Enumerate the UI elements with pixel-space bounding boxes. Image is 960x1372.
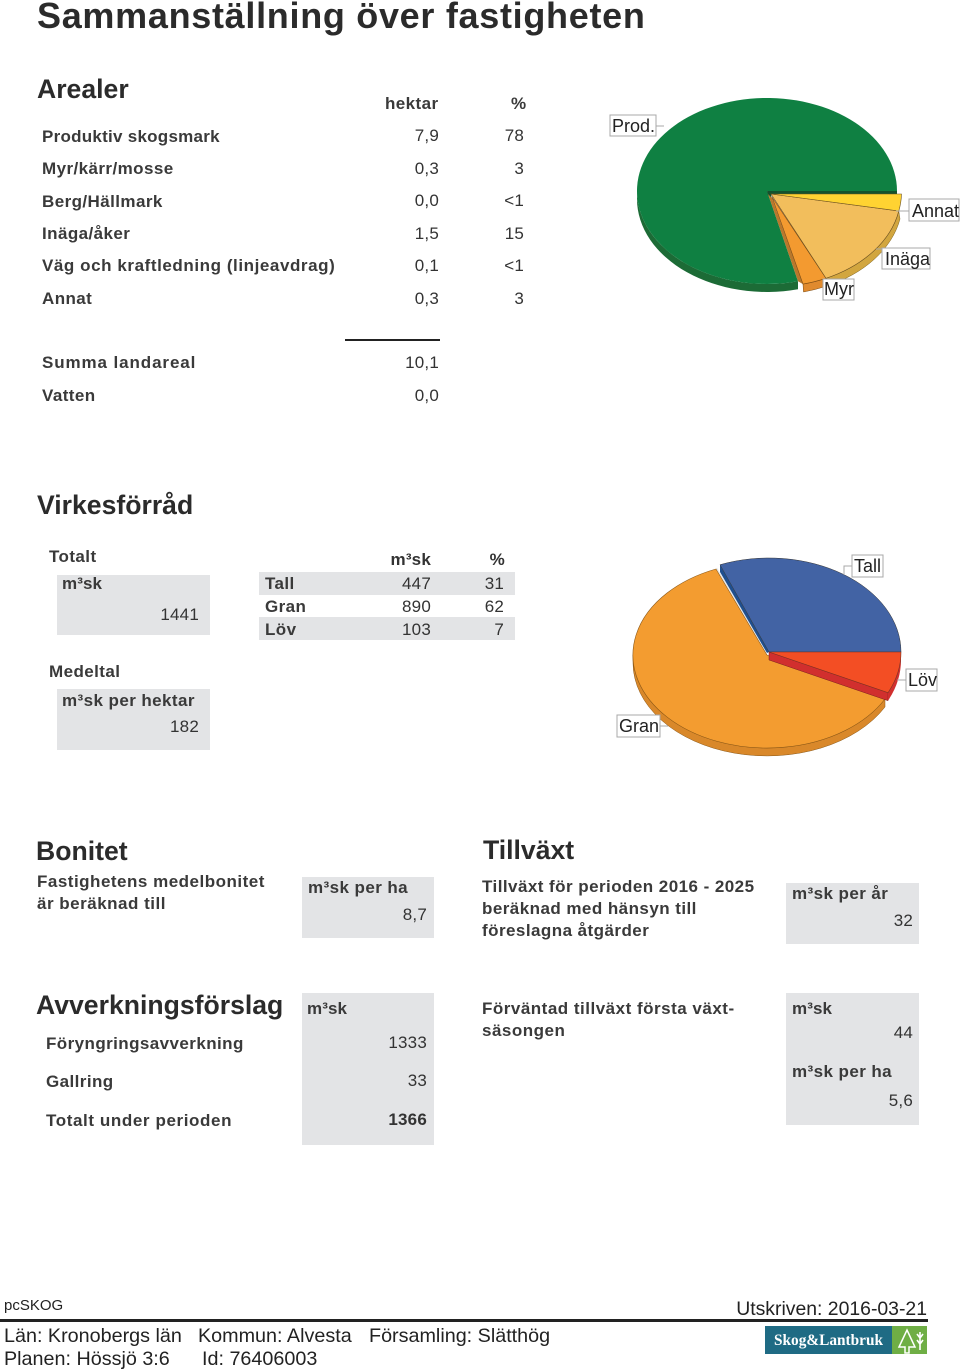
row: inäga bbox=[42, 224, 524, 243]
column header: hektar: hektar bbox=[385, 94, 439, 113]
row: löv: Löv bbox=[265, 620, 296, 639]
row: tall: Tall bbox=[265, 574, 295, 593]
row: gran bbox=[265, 597, 504, 616]
row: myr: 3 bbox=[514, 159, 524, 178]
box: totalt: 1441 bbox=[160, 605, 199, 624]
row: summa landareal: Summa landareal bbox=[42, 353, 196, 372]
label: löv: Löv bbox=[908, 670, 937, 690]
box: totalt: m³sk bbox=[62, 574, 102, 593]
box: totalt bbox=[57, 575, 210, 635]
table: species: m³sk bbox=[390, 550, 431, 569]
heading: avverkningsförslag: Avverkningsförslag bbox=[36, 990, 283, 1020]
box: förväntad values: m³sk per ha bbox=[792, 1062, 892, 1081]
panel: arealer bbox=[37, 74, 527, 405]
label: annat: Annat bbox=[912, 201, 959, 221]
row: gran: 62 bbox=[485, 597, 504, 616]
row: vatten bbox=[42, 386, 439, 405]
panel: bonitet bbox=[36, 836, 434, 938]
row: gran: Gran bbox=[265, 597, 306, 616]
text: förväntad tillväxt: säsongen bbox=[482, 1021, 565, 1040]
row: berg: 0,0 bbox=[415, 191, 439, 210]
row: gran: 890 bbox=[402, 597, 431, 616]
text: församling: Församling: Slätthög bbox=[369, 1325, 550, 1347]
text: tillväxt description: beräknad med hänsyn till bbox=[482, 899, 697, 918]
row: summa landareal: 10,1 bbox=[405, 353, 439, 372]
label: gran: Gran bbox=[619, 716, 659, 736]
heading: tillväxt: Tillväxt bbox=[483, 835, 574, 865]
row: summa landareal bbox=[42, 353, 439, 372]
pie chart: virkesförråd bbox=[616, 554, 938, 756]
footer bbox=[0, 1297, 928, 1370]
text: tillväxt description: föreslagna åtgärder bbox=[482, 921, 649, 940]
text: förväntad tillväxt bbox=[482, 999, 735, 1040]
logo: skog och lantbruk: Skog&Lantbruk bbox=[774, 1332, 883, 1349]
row: annat: 3 bbox=[514, 289, 524, 308]
row: tall: 31 bbox=[485, 574, 504, 593]
heading: virkesförråd: Virkesförråd bbox=[37, 490, 193, 520]
table: species: % bbox=[490, 550, 505, 569]
row: myr: Myr/kärr/mosse bbox=[42, 159, 174, 178]
label: totalt under perioden: Totalt under perioden bbox=[46, 1111, 232, 1130]
box: avverkning values bbox=[302, 993, 434, 1145]
row: annat: 0,3 bbox=[415, 289, 439, 308]
box: tillväxt: 32 bbox=[894, 911, 913, 930]
table: species bbox=[259, 550, 515, 640]
text: location line 1: Län: Kronobergs län bbox=[4, 1325, 182, 1347]
label: prod: Prod. bbox=[612, 116, 655, 136]
row: annat bbox=[42, 289, 524, 308]
row: löv bbox=[259, 617, 515, 640]
box: bonitet: m³sk per ha bbox=[308, 878, 408, 897]
row: annat: Annat bbox=[42, 289, 92, 308]
box: förväntad values bbox=[786, 993, 919, 1125]
label: myr: Myr bbox=[824, 279, 854, 299]
box: medeltal: 182 bbox=[170, 717, 199, 736]
row: väg bbox=[42, 256, 524, 275]
row: inäga: 15 bbox=[505, 224, 524, 243]
row: vatten: Vatten bbox=[42, 386, 96, 405]
text: bonitet description: Fastighetens medelbonitet bbox=[37, 872, 265, 891]
row: väg: 0,1 bbox=[415, 256, 439, 275]
label: gallring: Gallring bbox=[46, 1072, 114, 1091]
text: pcskog: pcSKOG bbox=[4, 1297, 63, 1314]
text: förväntad tillväxt: Förväntad tillväxt första växt- bbox=[482, 999, 735, 1018]
box: avverkning values: 33 bbox=[408, 1071, 427, 1090]
text: tillväxt description: Tillväxt för perioden 2016 - 2025 bbox=[482, 877, 754, 896]
label: inäga: Inäga bbox=[885, 249, 931, 269]
text: planen: Planen: Hössjö 3:6 bbox=[4, 1348, 170, 1370]
box: avverkning values: m³sk bbox=[307, 999, 347, 1018]
label: medeltal: Medeltal bbox=[49, 662, 120, 681]
text: kommun: Kommun: Alvesta bbox=[198, 1325, 352, 1347]
row: myr bbox=[42, 159, 524, 178]
box: medeltal bbox=[57, 689, 210, 750]
row: tall: 447 bbox=[402, 574, 431, 593]
label: tall: Tall bbox=[854, 556, 881, 576]
text: bonitet description bbox=[37, 872, 265, 913]
row: löv: 7 bbox=[494, 620, 504, 639]
row: inäga: Inäga/åker bbox=[42, 224, 130, 243]
box: avverkning values: 1366 bbox=[388, 1110, 427, 1129]
text: bonitet description: är beräknad till bbox=[37, 894, 166, 913]
box: medeltal: m³sk per hektar bbox=[62, 691, 195, 710]
box: avverkning values: 1333 bbox=[388, 1033, 427, 1052]
row: produktiv skogsmark bbox=[42, 126, 524, 146]
logo: skog och lantbruk bbox=[765, 1326, 927, 1354]
text: tillväxt description bbox=[482, 877, 754, 940]
row: vatten: 0,0 bbox=[415, 386, 439, 405]
box: förväntad values: 44 bbox=[894, 1023, 913, 1042]
row: berg: Berg/Hällmark bbox=[42, 192, 163, 211]
panel: virkesförråd bbox=[37, 490, 515, 750]
text: date: Utskriven: 2016-03-21 bbox=[736, 1298, 927, 1320]
panel: avverkningsförslag bbox=[36, 990, 434, 1145]
row: produktiv skogsmark: 78 bbox=[505, 126, 524, 145]
box: förväntad values: m³sk bbox=[792, 999, 832, 1018]
row: berg bbox=[42, 191, 524, 211]
panel: förväntad tillväxt bbox=[482, 993, 919, 1125]
row: produktiv skogsmark: Produktiv skogsmark bbox=[42, 127, 220, 146]
box: tillväxt bbox=[786, 883, 919, 944]
pie chart: arealer bbox=[610, 98, 960, 300]
panel: tillväxt bbox=[482, 835, 919, 944]
text: id: Id: 76406003 bbox=[202, 1348, 317, 1370]
row: inäga: 1,5 bbox=[415, 224, 439, 243]
heading: bonitet: Bonitet bbox=[36, 836, 128, 866]
label: föryngringsavverkning: Föryngringsavverkning bbox=[46, 1034, 244, 1053]
box: tillväxt: m³sk per år bbox=[792, 884, 888, 903]
row: väg: Väg och kraftledning (linjeavdrag) bbox=[42, 256, 335, 275]
row: berg: <1 bbox=[504, 191, 524, 210]
box: bonitet: 8,7 bbox=[403, 905, 427, 924]
row: tall bbox=[259, 572, 515, 595]
column header: percent: % bbox=[511, 94, 527, 113]
row: myr: 0,3 bbox=[415, 159, 439, 178]
row: produktiv skogsmark: 7,9 bbox=[415, 126, 439, 145]
label: totalt: Totalt bbox=[49, 547, 97, 566]
box: förväntad values: 5,6 bbox=[889, 1091, 913, 1110]
heading: arealer: Arealer bbox=[37, 74, 129, 104]
row: löv: 103 bbox=[402, 620, 431, 639]
box: bonitet bbox=[302, 877, 434, 938]
row: väg: <1 bbox=[504, 256, 524, 275]
